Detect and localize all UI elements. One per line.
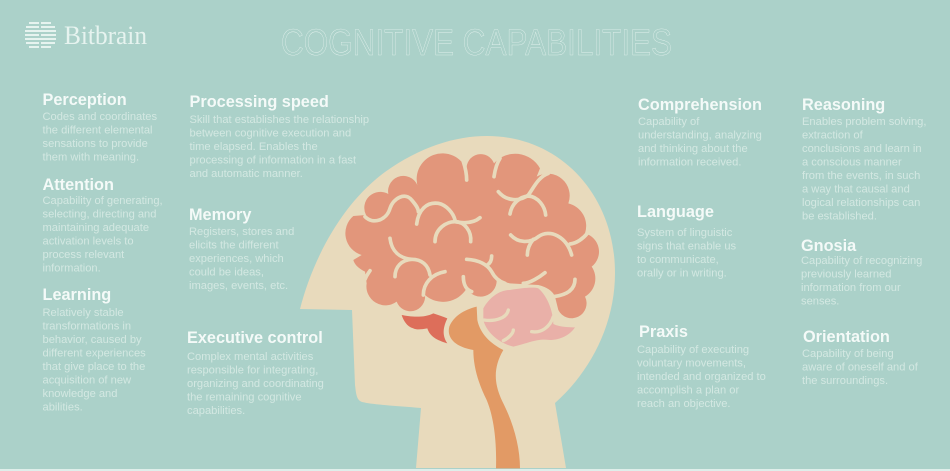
description: conclusions and learn in (802, 143, 922, 155)
heading: Comprehension (638, 96, 762, 114)
heading: Praxis (639, 323, 688, 341)
description: selecting, directing and (42, 208, 156, 220)
description: intended and organized to (637, 371, 766, 383)
description: and thinking about the (638, 143, 748, 155)
panel: reasoning (802, 96, 926, 222)
description: extraction of (802, 130, 864, 142)
description: accomplish a plan or (637, 384, 739, 396)
heading: Orientation (803, 328, 890, 346)
panel: learning (42, 286, 146, 414)
description: to communicate, (637, 254, 719, 266)
description: logical relationships can (802, 197, 920, 209)
description: between cognitive execution and (190, 128, 351, 140)
panel: attention (42, 176, 163, 274)
description: be established. (802, 210, 877, 222)
heading: Language (637, 203, 714, 221)
description: that give place to the (42, 361, 145, 373)
cerebellum (483, 288, 575, 347)
description: Registers, stores and (189, 226, 294, 238)
cerebrum folds (365, 158, 587, 297)
description: Capability of being (802, 348, 894, 360)
panel: language (637, 203, 737, 280)
description: abilities. (42, 402, 83, 414)
description: Codes and coordinates (42, 111, 157, 123)
description: the surroundings. (802, 375, 888, 387)
heading: Learning (42, 286, 111, 304)
description: behavior, caused by (42, 334, 142, 346)
icon: striped brain mark (25, 22, 56, 48)
panel: processing speed (190, 93, 369, 180)
description: the different elemental (42, 124, 153, 136)
head silhouette (300, 136, 615, 468)
panel: memory (189, 206, 294, 292)
description: knowledge and (42, 388, 117, 400)
description: and automatic manner. (190, 168, 303, 180)
logo wordmark: Bitbrain (64, 21, 147, 50)
description: organizing and coordinating (187, 378, 324, 390)
description: signs that enable us (637, 240, 737, 252)
description: activation levels to (42, 236, 134, 248)
description: System of linguistic (637, 227, 732, 239)
description: Enables problem solving, (802, 116, 926, 128)
description: process relevant (42, 249, 125, 261)
description: Capability of generating, (42, 195, 163, 207)
description: processing of information in a fast (190, 154, 357, 166)
description: Relatively stable (42, 307, 124, 319)
description: elicits the different (189, 240, 279, 252)
illustration: head with brain (300, 136, 615, 468)
panel: comprehension (638, 96, 762, 168)
description: images, events, etc. (189, 280, 288, 292)
logo: Bitbrain (25, 21, 147, 50)
description: information from our (801, 282, 901, 294)
cerebrum (345, 153, 599, 318)
frontal lower lobe (402, 313, 447, 343)
title: COGNITIVE CAPABILITIES (281, 22, 672, 63)
description: orally or in writing. (637, 268, 727, 280)
description: aware of oneself and of (802, 362, 919, 374)
heading: Processing speed (190, 93, 329, 111)
brain stem and spinal cord (449, 307, 520, 468)
description: transformations in (42, 320, 131, 332)
description: Complex mental activities (187, 351, 313, 363)
heading: Reasoning (802, 96, 885, 114)
description: understanding, analyzing (638, 130, 762, 142)
description: information received. (638, 156, 741, 168)
panel: gnosia (801, 237, 922, 308)
description: a conscious manner (802, 156, 902, 168)
heading: Attention (42, 176, 114, 194)
heading: Memory (189, 206, 251, 224)
heading: Executive control (187, 329, 323, 347)
panel: executive control (187, 329, 324, 417)
panel: orientation (802, 328, 919, 387)
description: voluntary movements, (637, 358, 746, 370)
heading: Perception (42, 91, 127, 109)
description: experiences, which (189, 253, 284, 265)
description: them with meaning. (42, 152, 139, 164)
description: previously learned (801, 268, 891, 280)
heading: Gnosia (801, 237, 857, 255)
description: different experiences (42, 348, 146, 360)
description: from the events, in such (802, 170, 920, 182)
description: senses. (801, 296, 839, 308)
description: responsible for integrating, (187, 364, 318, 376)
panel: perception (42, 91, 158, 164)
description: Capability of recognizing (801, 255, 922, 267)
description: information. (42, 262, 101, 274)
description: sensations to provide (42, 138, 148, 150)
description: capabilities. (187, 405, 245, 417)
panel: praxis (637, 323, 766, 410)
description: maintaining adequate (42, 222, 149, 234)
description: Skill that establishes the relationship (190, 114, 369, 126)
description: Capability of (638, 116, 699, 128)
description: reach an objective. (637, 398, 731, 410)
description: acquisition of new (42, 374, 132, 386)
description: a way that causal and (802, 184, 910, 196)
description: could be ideas, (189, 266, 264, 278)
description: the remaining cognitive (187, 392, 302, 404)
cerebellum folds (484, 310, 553, 341)
description: Capability of executing (637, 344, 749, 356)
description: time elapsed. Enables the (190, 141, 318, 153)
